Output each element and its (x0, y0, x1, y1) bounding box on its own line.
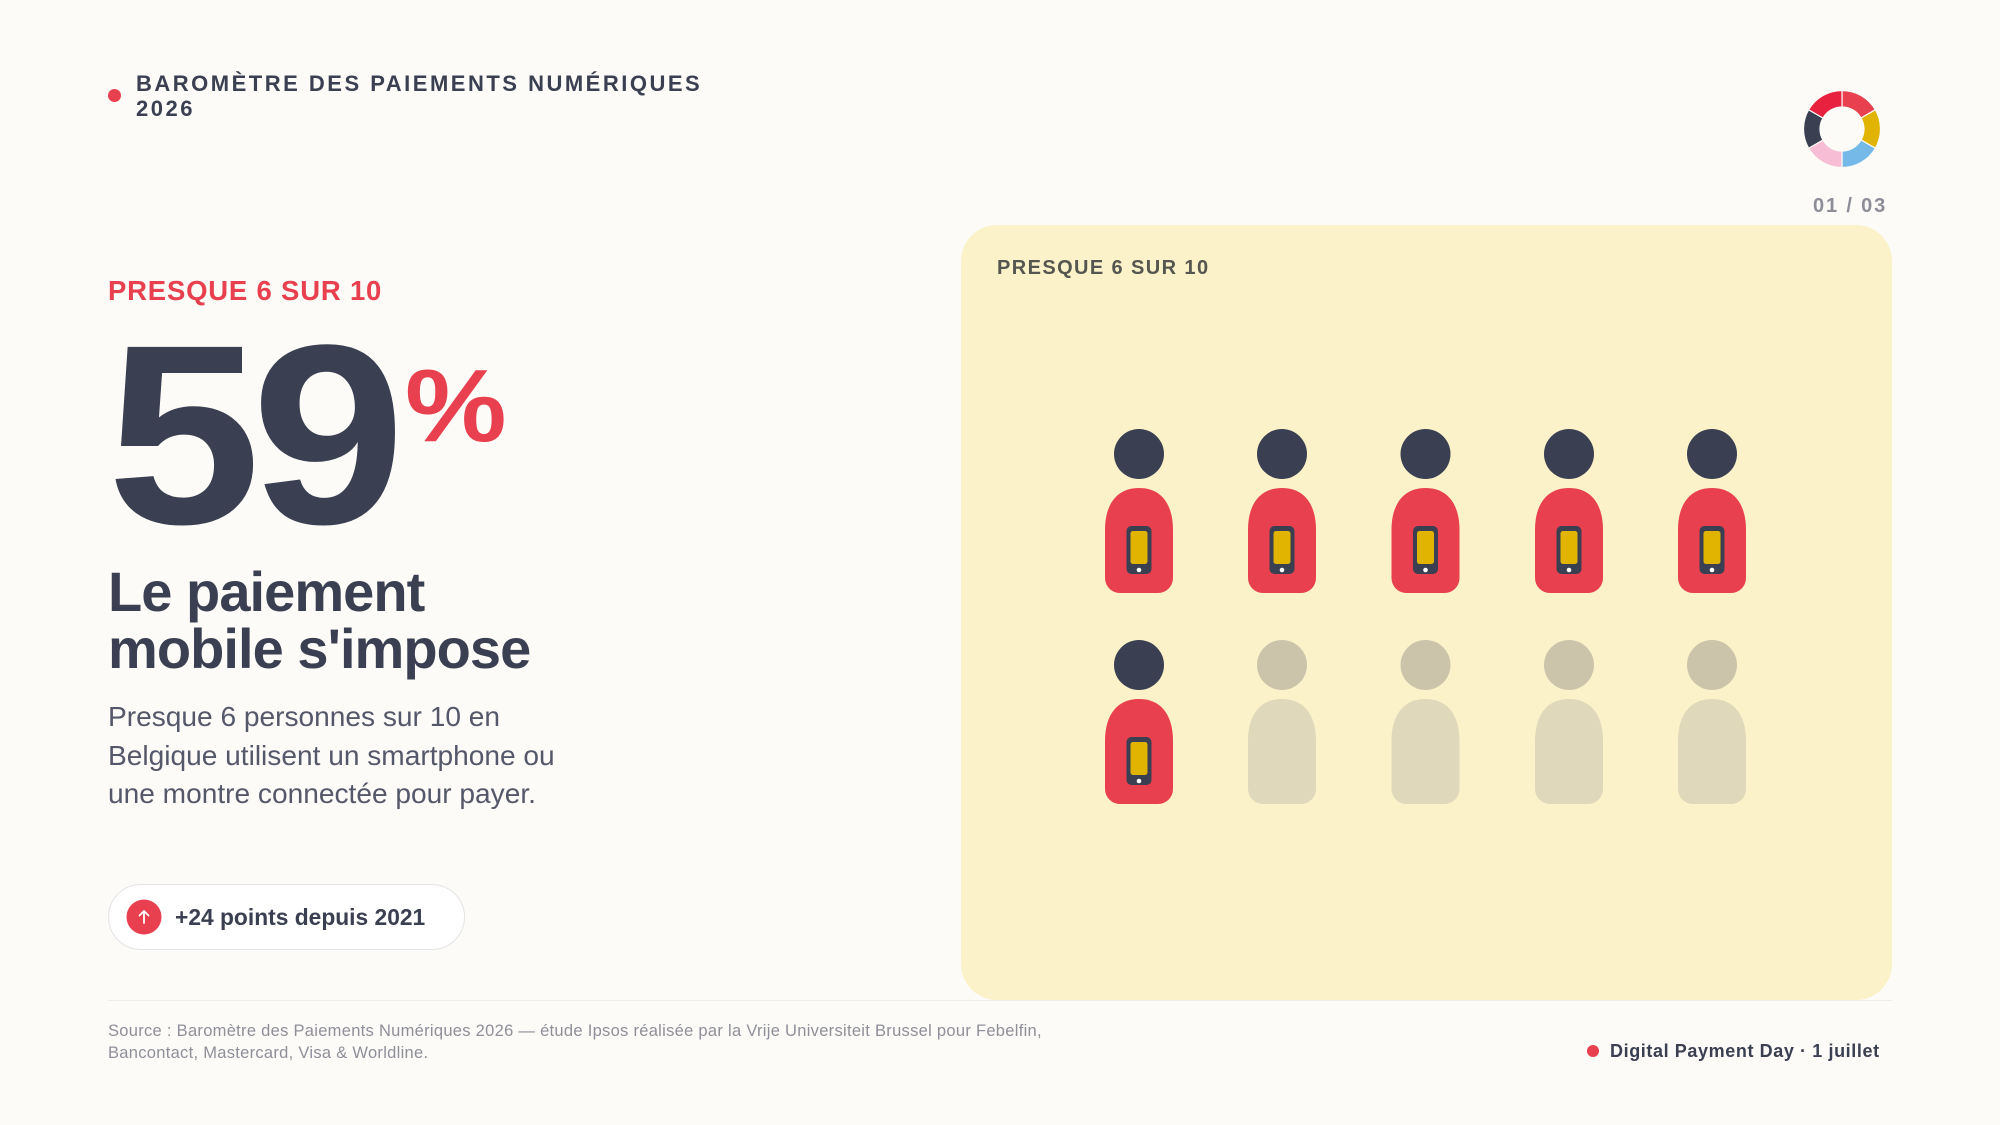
eyebrow: PRESQUE 6 SUR 10 (108, 274, 382, 306)
icon: up arrow (126, 900, 162, 934)
header title: BAROMÈTRE DES PAIEMENTS NUMÉRIQUES (136, 70, 702, 96)
person 6 (1105, 640, 1173, 804)
person 8 inactive (1392, 640, 1460, 804)
person 9 inactive (1535, 640, 1603, 804)
panel label: PRESQUE 6 SUR 10 (997, 257, 1209, 279)
footer dot (1587, 1045, 1599, 1057)
header title (136, 70, 702, 121)
person 5 (1678, 429, 1746, 593)
person 3 (1392, 429, 1460, 593)
header dot (108, 89, 121, 102)
callout pill (108, 884, 465, 950)
icon: donut logo (1804, 91, 1880, 167)
footer event label: Digital Payment Day · 1 juillet (1610, 1041, 1880, 1061)
person 1 (1105, 429, 1173, 593)
page counter: 01 / 03 (1813, 195, 1887, 217)
description (108, 701, 555, 809)
person 4 (1535, 429, 1603, 593)
source note (108, 1022, 1042, 1062)
callout text: +24 points depuis 2021 (175, 904, 425, 930)
percent sign: % (405, 348, 507, 463)
panel: pictogram (961, 225, 1892, 1000)
big number 59: 59 (107, 292, 396, 578)
heading: Le paiement (108, 560, 424, 623)
header title: 2026 (136, 96, 195, 121)
person 7 inactive (1248, 640, 1316, 804)
description: une montre connectée pour payer. (108, 778, 536, 809)
person 2 (1248, 429, 1316, 593)
source note: Source : Baromètre des Paiements Numériques 2026 — étude Ipsos réalisée par la Vrije Universiteit Brussel pour Febelfin, (108, 1022, 1042, 1040)
source note: Bancontact, Mastercard, Visa & Worldline. (108, 1044, 428, 1062)
description: Belgique utilisent un smartphone ou (108, 740, 555, 770)
heading (108, 560, 530, 680)
description: Presque 6 personnes sur 10 en (108, 701, 500, 732)
person 10 inactive (1678, 640, 1746, 804)
heading: mobile s'impose (108, 617, 530, 680)
